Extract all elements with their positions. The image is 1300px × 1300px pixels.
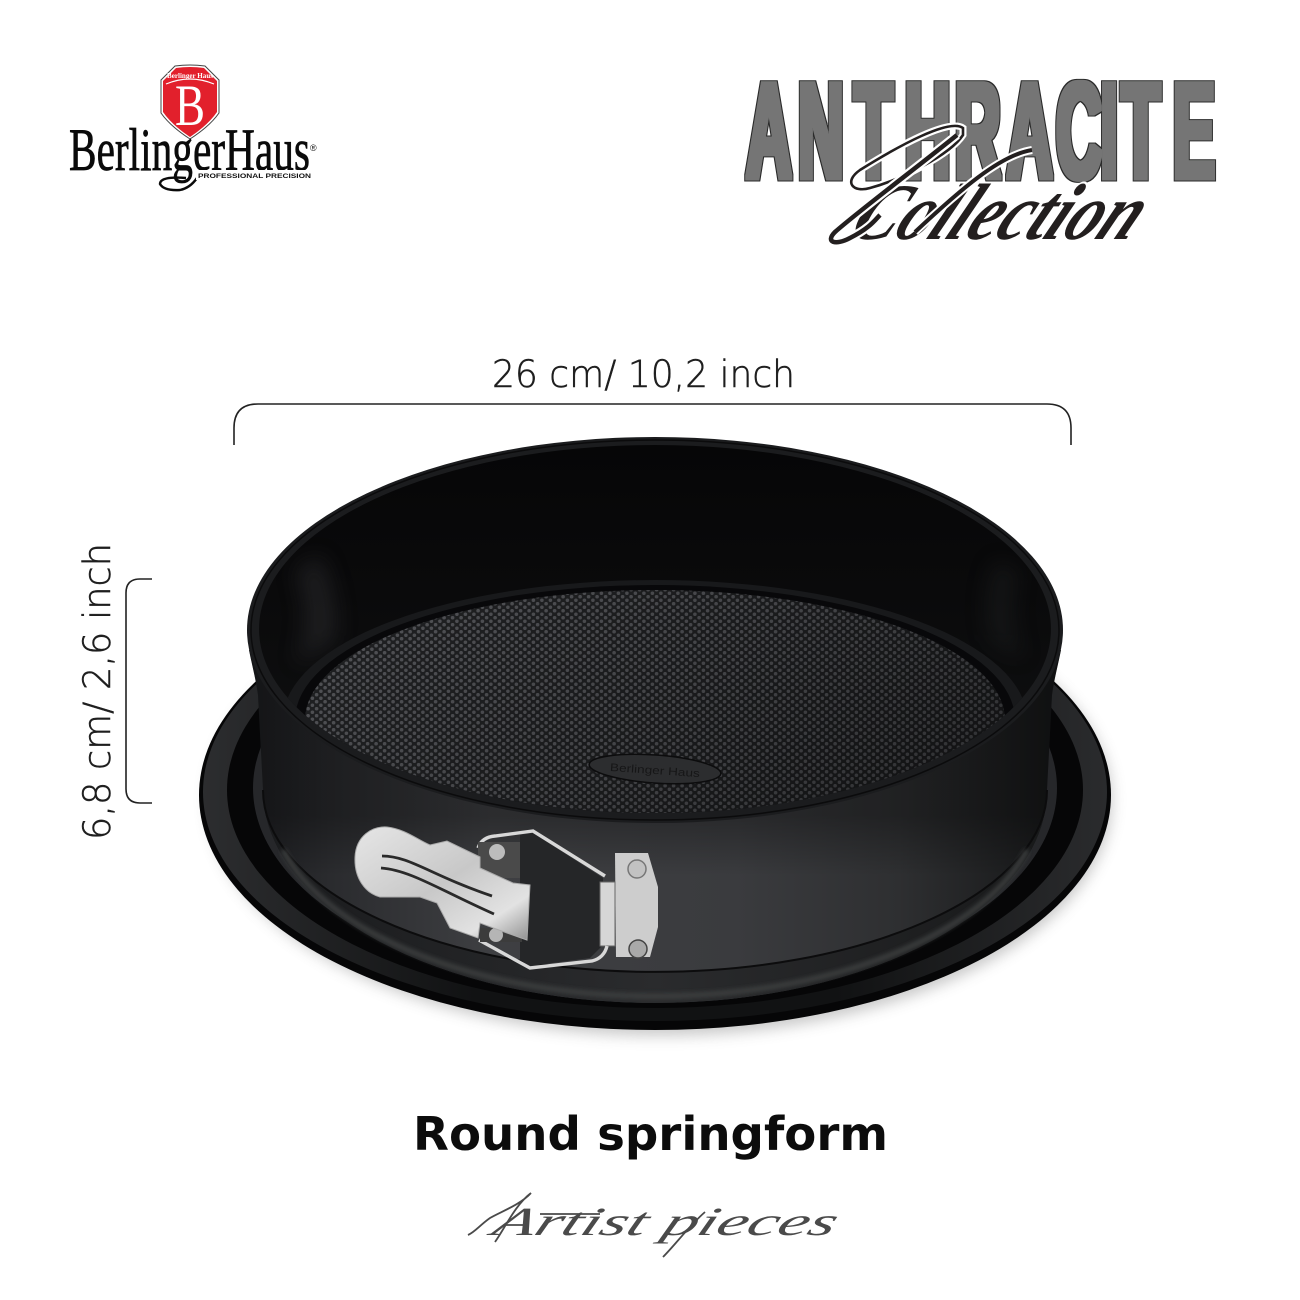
- latch shadow panel: [520, 833, 603, 966]
- tray shadow: [208, 564, 1112, 1036]
- interior: [259, 445, 1051, 813]
- wordmark: BerlingerHaus: [69, 117, 310, 183]
- icon: red shield: Berlinger Haus: [167, 71, 213, 80]
- interior wall glints: [299, 562, 336, 652]
- embossed floor badge: Berlinger Haus: [610, 762, 701, 780]
- base tray: [199, 560, 1111, 1030]
- embossed floor badge: [588, 754, 722, 784]
- lower rolled band of the wall: [263, 790, 1047, 1003]
- script flourish: [831, 126, 1032, 242]
- textured floor: [288, 562, 1022, 813]
- dimension bracket: height: [126, 579, 152, 803]
- dimension label: width: 26 cm/ 10,2 inch: [492, 353, 795, 396]
- lever grooves: [382, 856, 492, 896]
- script text: Artist pieces: [482, 1199, 846, 1244]
- product: springform pan: [199, 437, 1112, 1036]
- right rivet plate: [600, 853, 658, 958]
- brand logo: Berlinger Haus: [69, 65, 317, 190]
- wire bail: [478, 831, 607, 968]
- heading: Anthracite: ANTHRACITE: [746, 53, 1215, 208]
- product title: Round springform: [413, 1107, 888, 1161]
- descender loop of the g: [160, 178, 197, 190]
- hinge hardware: [478, 842, 522, 942]
- dimension bracket: width: [234, 404, 1071, 445]
- icon: red shield: B: [175, 73, 205, 138]
- rim: [247, 437, 1063, 823]
- collection logo: Anthracite Collection: [746, 53, 1215, 257]
- script: Collection: Collection: [837, 169, 1167, 257]
- tagline: [196, 170, 314, 180]
- registered mark: ®: [310, 143, 317, 153]
- script flourishes: [468, 1193, 705, 1257]
- tagline: Artist pieces: [468, 1193, 846, 1257]
- side wall: [249, 650, 1061, 1003]
- lever plate: [355, 827, 530, 940]
- brand logo: Berlinger Haus: PROFESSIONAL PRECISION: [198, 173, 312, 180]
- dimension label: height: 6,8 cm/ 2,6 inch: [76, 543, 119, 840]
- icon: red shield: [161, 65, 219, 139]
- latch: [355, 827, 658, 968]
